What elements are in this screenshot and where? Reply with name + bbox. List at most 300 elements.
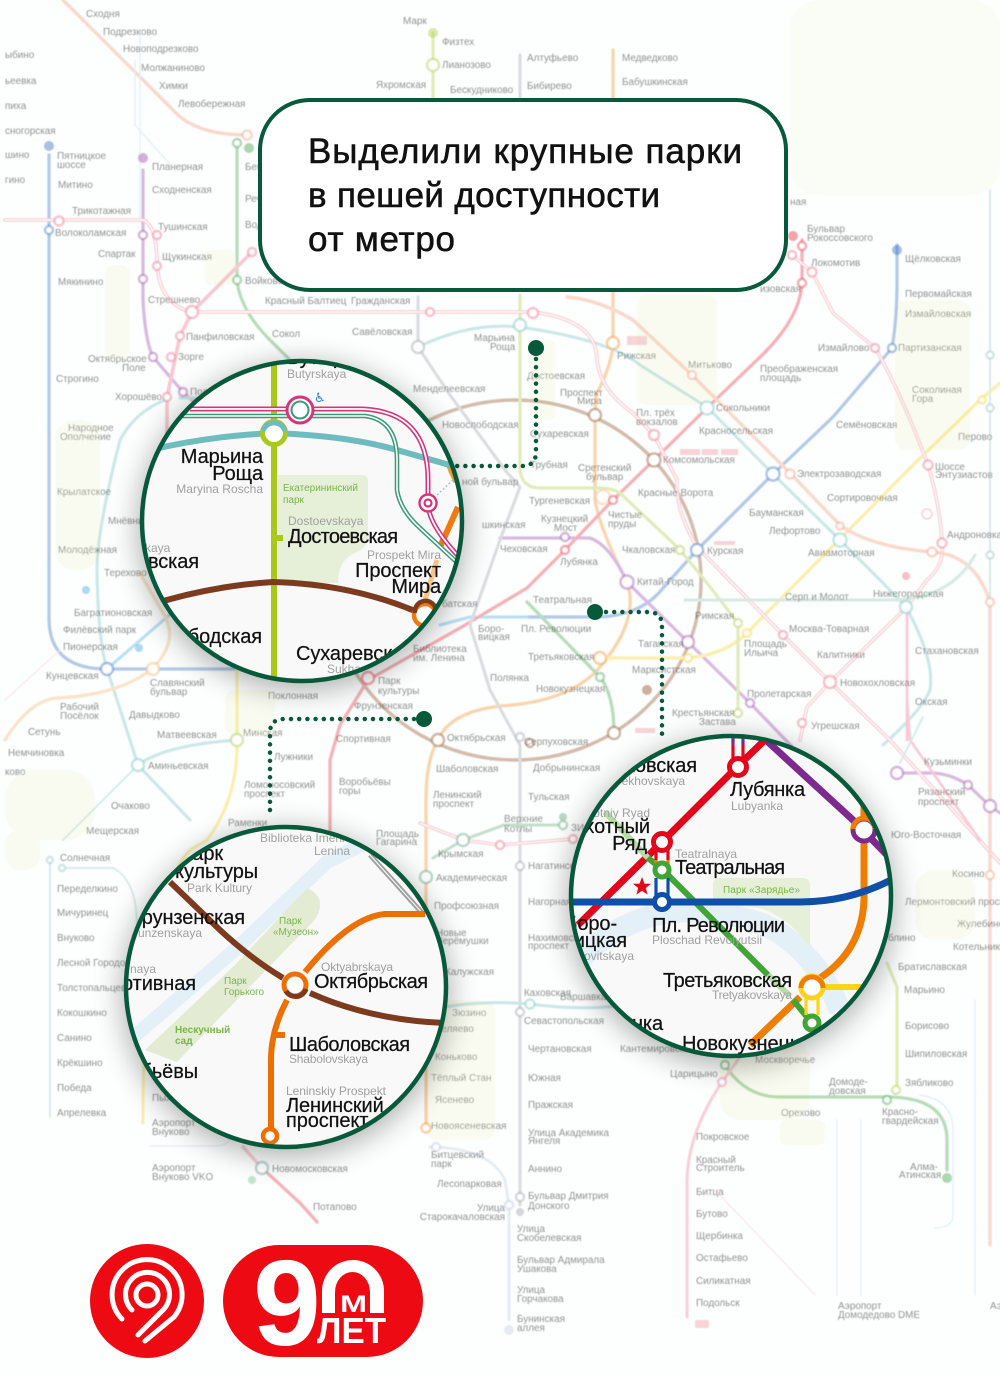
station labels: Lenina — [314, 844, 350, 858]
map station labels: Славянский — [150, 678, 205, 689]
map station labels: Очаково — [111, 801, 150, 812]
map station labels: Спартак — [98, 249, 136, 260]
map station labels: Калитники — [817, 650, 865, 661]
orange line — [271, 914, 425, 1130]
map station labels: Новохохловская — [840, 678, 915, 689]
map station labels: Аминьевская — [148, 761, 208, 772]
map station labels: Локомотив — [811, 258, 860, 269]
map station labels: Химки — [159, 81, 188, 92]
map station labels: Бескудниково — [450, 85, 514, 96]
dotted connector: Ekaterininsky park — [455, 340, 544, 466]
station labels: Охотный — [569, 816, 650, 838]
map stations — [45, 59, 996, 1209]
map station labels: Сходненская — [152, 185, 212, 196]
map station labels: Молжаниново — [141, 63, 206, 74]
map station labels: Домоде- — [829, 1077, 868, 1088]
grey line — [370, 855, 424, 915]
map station labels: проспект — [918, 797, 960, 808]
station labels: Полянка — [585, 1013, 664, 1035]
map station labels: Скобелевская — [517, 1233, 581, 1244]
red line — [578, 735, 770, 925]
title callout: от метро — [308, 220, 455, 259]
station labels: naya — [130, 962, 156, 976]
map station labels: Ополчение — [60, 432, 111, 443]
logo: metro nine — [90, 1244, 204, 1358]
map station labels: Воробьёвы — [339, 777, 391, 788]
icon: red star — [633, 877, 651, 895]
map station labels: Внуково — [57, 933, 95, 944]
map station labels: культуры — [378, 686, 419, 697]
station labels: Парк — [224, 976, 247, 987]
map station labels: Бауманская — [749, 508, 804, 519]
map station labels: Марьина — [474, 333, 515, 344]
map station labels: Шаболовская — [436, 764, 498, 775]
map station labels: Рязанский — [918, 787, 965, 798]
map station labels: Боро- — [478, 624, 504, 635]
station labels: бодская — [188, 626, 262, 648]
station labels: вская — [148, 551, 199, 573]
park area — [278, 475, 368, 583]
map station labels: Лесной Городок — [57, 958, 130, 969]
station labels: Шаболовская — [289, 1034, 410, 1056]
map station labels: блино — [888, 933, 916, 944]
station labels: Frunzenskaya — [127, 926, 202, 940]
map station labels: гино — [5, 175, 26, 186]
map station labels: Коньково — [435, 1052, 478, 1063]
map station labels: Римская — [695, 611, 734, 622]
map station labels: Шоссе — [935, 462, 965, 473]
title callout: Выделили крупные парки — [308, 132, 742, 171]
map station labels: Багратионовская — [74, 608, 152, 619]
blue line — [570, 878, 895, 902]
orange line — [750, 790, 864, 1045]
station labels: проспект — [286, 1110, 368, 1132]
map station labels: Терехово — [104, 568, 147, 579]
map station labels: довская — [829, 1086, 866, 1097]
map station labels: Менделеевская — [413, 384, 485, 395]
MCD and MCC pink lines — [5, 220, 1000, 863]
station labels — [574, 760, 806, 1054]
station labels: Воробьёвы — [94, 1061, 198, 1083]
line 8A yellow — [143, 650, 237, 1123]
map station labels: Нахимовский — [528, 933, 589, 944]
map station labels: Крёкшино — [57, 1058, 103, 1069]
map station labels: Толстопальцево — [57, 983, 132, 994]
map station labels: Новоясеневская — [431, 1121, 506, 1132]
green double line — [180, 416, 465, 570]
station labels: Biblioteka Imeni — [260, 831, 345, 845]
station labels: Sukharevskaya — [327, 662, 409, 676]
map station labels: Крылатское — [57, 487, 112, 498]
map station labels: Марк — [403, 16, 427, 27]
map station labels: Электрозаводская — [797, 469, 881, 480]
dotted connector: Gorky park — [270, 711, 432, 818]
map station labels: Застава — [699, 717, 736, 728]
map station labels: Орехово — [781, 1108, 821, 1119]
map station labels: Пыхтино — [152, 1093, 193, 1104]
map station labels: Внуково VKO — [152, 1172, 213, 1183]
map station labels: Левобережная — [178, 99, 245, 110]
map station labels: Октябрьская — [447, 733, 506, 744]
stations — [263, 974, 306, 1143]
map station labels: аллея — [517, 1323, 545, 1334]
map station labels: Фрунзенская — [354, 701, 413, 712]
map station labels: Бутово — [696, 1209, 728, 1220]
map station labels: Потапово — [313, 1202, 357, 1213]
map station labels: Подрезково — [103, 27, 157, 38]
teal line — [150, 433, 460, 468]
map station labels: вокзалов — [636, 417, 678, 428]
map station labels: Посёлок — [60, 711, 99, 722]
map station labels: Калужская — [445, 967, 494, 978]
map station labels: шкинская — [482, 520, 526, 531]
map station labels: Москворечье — [755, 1055, 816, 1066]
logo: 90 years: М — [340, 1291, 367, 1318]
map station labels: Перово — [958, 432, 993, 443]
map station labels: Академическая — [436, 873, 507, 884]
map station labels: Савёловская — [352, 327, 412, 338]
map station labels: Поле — [122, 363, 146, 374]
map station labels: Добрынинская — [533, 763, 600, 774]
station labels: Роща — [212, 463, 264, 485]
map station labels: Трубная — [530, 460, 568, 471]
map station labels: Варшавка — [560, 992, 607, 1003]
map station labels: Юго-Восточная — [891, 830, 961, 841]
map station labels: Щёлковская — [905, 254, 961, 265]
map station labels: Немчиновка — [8, 748, 65, 759]
map station labels: Полежаевская — [190, 387, 257, 398]
map station labels: Лефортово — [769, 526, 821, 537]
map station labels: Улица — [477, 1203, 505, 1214]
map station labels: Нагатинская — [528, 861, 585, 872]
map station labels: Стахановская — [915, 646, 979, 657]
map station labels: Черёмушки — [436, 936, 489, 947]
map station labels: Митино — [58, 180, 93, 191]
map station labels: Мещерская — [86, 826, 139, 837]
map station labels: Гражданская — [351, 296, 410, 307]
station labels: Сухаревская — [296, 643, 414, 665]
map station labels: Южная — [528, 1073, 561, 1084]
green line — [605, 812, 648, 858]
station labels: Театральная — [675, 857, 785, 879]
map station labels: Сетунь — [28, 727, 60, 738]
station labels: вицкая — [563, 930, 627, 952]
map station labels: Остафьево — [696, 1253, 748, 1264]
station labels: Боро- — [564, 913, 617, 935]
station labels: Oktyabrskaya — [321, 960, 393, 974]
river — [575, 911, 840, 1010]
transfer passages — [656, 730, 818, 1015]
stations — [654, 758, 875, 1030]
map station labels: Серпуховская — [524, 737, 588, 748]
map station labels: Энтузиастов — [935, 470, 993, 481]
map station labels: Хорошёво — [115, 392, 163, 403]
map station labels: Рижская — [617, 351, 656, 362]
map station labels: шино — [5, 150, 30, 161]
map station labels: шоссе — [57, 160, 86, 171]
station labels: Maryina Roscha — [176, 482, 263, 496]
map station labels: Чистые — [608, 510, 643, 521]
map station labels: Строитель — [696, 1163, 745, 1174]
map station labels: Лубянка — [560, 557, 598, 568]
station labels: сад — [175, 1036, 193, 1047]
map station labels: Мира — [577, 396, 602, 407]
map station labels: Гора — [912, 394, 934, 405]
map station labels: Строгино — [56, 374, 99, 385]
map station labels: ыбино — [5, 50, 35, 61]
logo: 90 years: 9 — [253, 1235, 321, 1371]
logo: 90 years: ЛЕТ — [317, 1310, 386, 1351]
station labels — [128, 834, 427, 1132]
map station labels: Чертановская — [528, 1044, 592, 1055]
map station labels: Измайлово — [818, 343, 870, 354]
map station labels: Волоколамская — [55, 228, 126, 239]
map station labels: изовская — [760, 284, 801, 295]
map station labels: Партизанская — [898, 343, 962, 354]
station labels: Borovitskaya — [565, 949, 634, 963]
map station labels: гвардейская — [882, 1116, 939, 1127]
map station labels: Новоподрезково — [123, 44, 199, 55]
map station labels: Лианозово — [442, 60, 491, 71]
map station labels: Кунцевская — [46, 671, 99, 682]
map station labels: Севастопольская — [524, 1016, 604, 1027]
map station labels: бульвар — [150, 687, 188, 698]
station labels: Butyrskaya — [287, 367, 347, 381]
map station labels: Красно- — [882, 1107, 918, 1118]
station labels: Лубянка — [730, 779, 806, 801]
lime line — [271, 355, 277, 685]
title callout — [260, 100, 786, 290]
map station labels: ково — [5, 767, 26, 778]
map station labels: Пятницкое — [57, 151, 107, 162]
map station labels: Театральная — [533, 595, 592, 606]
map station labels: Третьяковская — [528, 652, 595, 663]
map station labels: Медведково — [622, 53, 679, 64]
map station labels: Рабочий — [60, 702, 99, 713]
map station labels: Гагарина — [376, 837, 418, 848]
station labels: Новокузнецкая — [682, 1033, 821, 1055]
map station labels: вицкая — [478, 632, 510, 643]
map station labels: Сокол — [272, 329, 300, 340]
map station labels: Новые — [436, 928, 467, 939]
map station labels: Ленинский — [433, 790, 482, 801]
map station labels: пруды — [608, 519, 636, 530]
station labels: Tretyakovskaya — [712, 988, 792, 1002]
line 4 light blue — [107, 580, 527, 669]
map station labels: Янгеля — [528, 1136, 560, 1147]
brown line — [170, 882, 445, 1023]
map station labels: сногорская — [5, 126, 56, 137]
station labels: Октябрьская — [314, 971, 428, 993]
station labels: Фрунзенская — [127, 907, 245, 929]
map station labels: Соколиная — [912, 385, 962, 396]
map station labels: Войковская — [245, 276, 298, 287]
map station labels: Семёновская — [836, 420, 897, 431]
map station labels: Трикотажная — [72, 206, 131, 217]
map station labels: Марьино — [904, 985, 945, 996]
station labels: Спортивная — [86, 973, 196, 995]
station labels: Ряд — [612, 833, 647, 855]
map station labels: Комсомольская — [663, 455, 735, 466]
map station labels: Ушакова — [517, 1264, 557, 1275]
map station labels: Щербинка — [696, 1231, 743, 1242]
map station labels: Угрешская — [811, 721, 860, 732]
map station labels: Тургеневская — [529, 496, 590, 507]
map station labels: Сортировочная — [827, 493, 898, 504]
map station labels: Тёплый Стан — [431, 1073, 491, 1084]
line 2 green — [237, 143, 947, 1170]
map station labels: Чкаловская — [622, 545, 675, 556]
map station labels: Площадь — [376, 829, 419, 840]
map station labels: Красносельская — [699, 426, 773, 437]
map station labels: Яхромская — [376, 80, 426, 91]
station labels: Lubyanka — [731, 799, 783, 813]
map station labels: Давыдково — [129, 710, 180, 721]
station labels: Shabolovskaya — [289, 1052, 368, 1066]
map station labels: Сокольники — [716, 403, 770, 414]
map station labels: Измайловская — [905, 309, 971, 320]
map station labels: Поклонная — [268, 691, 318, 702]
map station labels: Покровское — [696, 1132, 750, 1143]
map station labels: Планерная — [152, 162, 203, 173]
map station labels: площадь — [760, 373, 801, 384]
map station labels: Панфиловская — [186, 332, 254, 343]
station labels: Горького — [224, 987, 265, 998]
station labels: Ploschad Revolyutsii — [652, 933, 762, 947]
map station labels: Зорге — [178, 352, 204, 363]
map station labels: Крымская — [438, 849, 483, 860]
map station labels: Достоевская — [527, 371, 585, 382]
map station labels: Речной — [245, 194, 278, 205]
station labels: Park Kultury — [187, 881, 252, 895]
station labels: парк — [283, 495, 305, 506]
map station labels: Библиотека — [413, 644, 467, 655]
line 7 purple — [143, 170, 1000, 813]
map station labels: Ясенево — [435, 1095, 475, 1106]
map station labels: Пионерская — [63, 642, 118, 653]
transfer lines — [425, 470, 456, 600]
yellow line — [825, 984, 862, 990]
map station labels: Мнёвники — [108, 516, 153, 527]
map station labels: Физтех — [442, 37, 474, 48]
map station labels: проспект — [433, 799, 475, 810]
station labels: ekhovskaya — [622, 774, 685, 788]
map station labels: Парк — [378, 676, 401, 687]
map station labels: Китай-Город — [637, 577, 694, 588]
panel: magnifier Ekaterininsky park — [139, 347, 465, 690]
map station labels: Братиславская — [898, 962, 967, 973]
station labels: Достоевская — [288, 526, 398, 548]
map station labels: Митьково — [688, 360, 732, 371]
river — [130, 843, 365, 1040]
station labels: Третьяковская — [663, 970, 792, 992]
map station labels: Горчакова — [517, 1294, 564, 1305]
map station labels: Верхние — [504, 814, 543, 825]
map station labels: Бульвар Адмирала — [517, 1255, 605, 1266]
map station labels: Нижегородская — [873, 589, 943, 600]
map station labels: Крестьянская — [672, 708, 734, 719]
logo: 90 years — [223, 1235, 423, 1371]
map station labels: ьеевка — [5, 76, 37, 87]
map station labels: Москва-Товарная — [789, 624, 869, 635]
map station labels: Щукинская — [162, 252, 212, 263]
line 1 red — [243, 240, 802, 1222]
purple line — [765, 742, 884, 857]
map station labels: Серп и Молот — [785, 592, 849, 603]
map station labels: Беговая — [245, 162, 282, 173]
panel: magnifier Gorky park — [86, 827, 449, 1156]
map station labels: Старокачаловская — [420, 1212, 505, 1223]
map station labels: Чеховская — [500, 544, 548, 555]
station labels: Prospekt Mira — [367, 548, 441, 562]
map station labels: Таганская — [638, 639, 684, 650]
map station labels: им. Ленина — [413, 653, 465, 664]
map station labels: Санино — [57, 1033, 92, 1044]
station labels: Парк — [279, 916, 302, 927]
map station labels: бульвар — [586, 472, 624, 483]
map station labels: Тушинская — [158, 222, 208, 233]
map station labels: Матвеевская — [157, 730, 217, 741]
station labels: Leninskiy Prospekt — [286, 1084, 387, 1098]
map station labels: Атинская — [899, 1170, 941, 1181]
map station labels: Каховская — [524, 988, 571, 999]
map station labels: Роща — [490, 342, 516, 353]
station labels: Парк — [178, 843, 223, 865]
map station labels: Бибирево — [527, 81, 572, 92]
map station labels: Спортивная — [336, 734, 391, 745]
map station labels: Улица — [517, 1224, 546, 1235]
dotted connector: Zaryadye park — [587, 604, 662, 740]
map station labels: Кузьминки — [924, 757, 972, 768]
station labels: Пл. Революции — [652, 915, 785, 937]
map station labels: Аэропорт — [152, 1118, 196, 1129]
station labels: ковская — [626, 755, 697, 777]
station labels: Мира — [391, 576, 442, 598]
map station labels: Лесопарковая — [437, 1179, 502, 1190]
map station labels: Тульская — [528, 792, 569, 803]
map station labels: Битца — [696, 1187, 724, 1198]
map station labels: Раменки — [228, 818, 267, 829]
map station labels: Водный — [245, 220, 281, 231]
station labels: Бутырская — [287, 347, 385, 369]
map station labels: Пл. Революции — [521, 624, 591, 635]
map station labels: пиха — [5, 101, 27, 112]
stations — [262, 397, 436, 626]
line 10 lime — [433, 33, 897, 1090]
map station labels: Окская — [915, 697, 947, 708]
map station labels: Площадь — [744, 639, 787, 650]
map station labels: Подольск — [696, 1298, 740, 1309]
park area — [713, 878, 810, 948]
station labels: Teatralnaya — [675, 847, 737, 861]
map station labels: Пражская — [528, 1100, 573, 1111]
station labels: Проспект — [355, 560, 441, 582]
line 3 blue — [49, 155, 897, 669]
station labels: kaya — [145, 541, 171, 555]
map station labels: Мякинино — [58, 277, 104, 288]
map station labels: Мост — [554, 523, 578, 534]
map station labels: Борисово — [905, 1021, 950, 1032]
map station labels: Зябликово — [905, 1078, 954, 1089]
brown line — [150, 582, 415, 611]
icon: accessibility: ♿ — [314, 391, 326, 406]
map station labels: Внуково — [152, 1127, 190, 1138]
map station labels: Красные Ворота — [638, 488, 714, 499]
map station labels: Донского — [528, 1201, 570, 1212]
map station labels: Лужники — [274, 752, 313, 763]
station labels: Екатерининский — [283, 483, 358, 494]
station labels: Парк «Зарядье» — [723, 885, 800, 896]
